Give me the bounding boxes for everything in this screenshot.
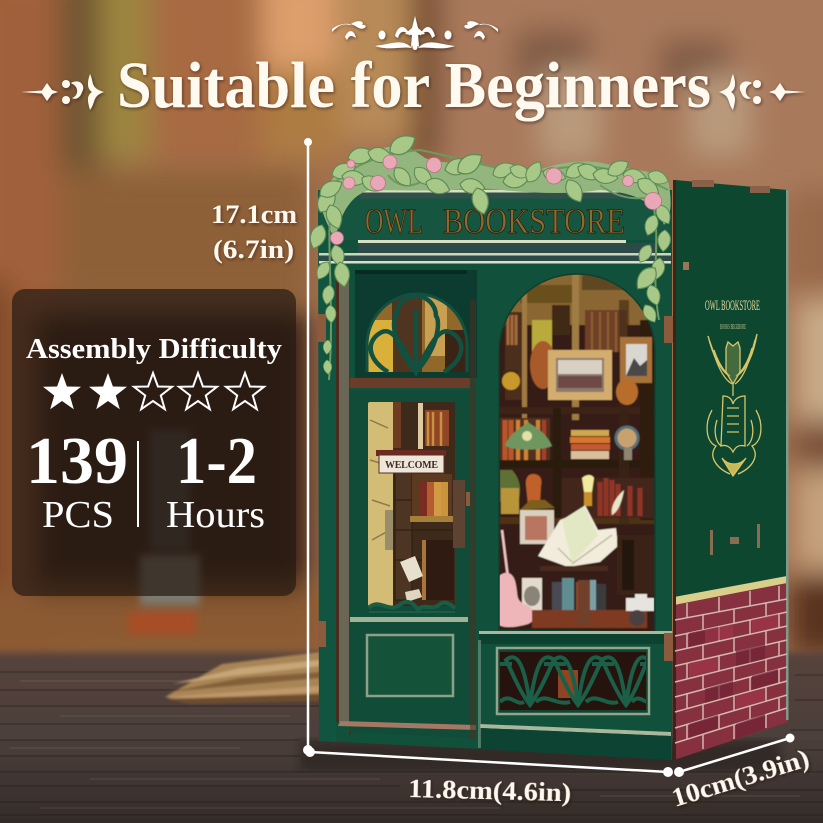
- door scroll trim: [369, 602, 455, 612]
- welcome sign: WELCOME: [385, 460, 438, 471]
- height label: [211, 200, 297, 264]
- star rating: [43, 373, 264, 409]
- small frame: [620, 337, 652, 383]
- depth label: 10cm(3.9in): [668, 743, 813, 813]
- left title ornament: [21, 74, 104, 110]
- height label: 17.1cm: [211, 200, 297, 229]
- side wall: [673, 180, 788, 760]
- top ornament: [332, 16, 498, 50]
- time unit: Hours: [166, 494, 265, 536]
- middle shelf books: [500, 418, 550, 460]
- vines and roses: [306, 130, 674, 380]
- lattice vent: [497, 648, 649, 714]
- shelves: [521, 406, 580, 414]
- width dimension line: [306, 748, 672, 776]
- cornice stripes: [319, 240, 671, 264]
- panel heading: Assembly Difficulty: [26, 334, 282, 365]
- brick wall: [675, 586, 787, 749]
- height label: (6.7in): [213, 235, 294, 264]
- divider: [137, 441, 139, 527]
- welcome sign: [376, 450, 446, 473]
- envelopes on table: [165, 652, 320, 704]
- table lamp: [582, 475, 594, 492]
- left items: [500, 470, 520, 502]
- tiffany lamp: [505, 422, 552, 450]
- piece count: 139: [26, 424, 128, 498]
- owl figurine: [526, 474, 542, 505]
- shop sign text: OWL: [365, 201, 423, 241]
- quill: [612, 490, 624, 515]
- door handle: [453, 480, 465, 548]
- side wall slots: [710, 524, 760, 555]
- base trim: [478, 640, 671, 760]
- main window: [495, 270, 660, 635]
- open book: [538, 505, 618, 567]
- width label: 11.8cm(4.6in): [408, 774, 572, 807]
- difficulty panel: [12, 289, 296, 596]
- owl emblem: [707, 334, 761, 476]
- door: [349, 390, 470, 738]
- window sill: [479, 631, 672, 644]
- big frame: [548, 350, 612, 400]
- violin: [499, 530, 534, 627]
- door lintel: [350, 378, 470, 388]
- right desk: [616, 538, 619, 548]
- ornate oval frame: [530, 341, 556, 389]
- upper shelf books: [505, 312, 522, 400]
- lower books: [522, 578, 542, 610]
- foliage backing: [320, 146, 671, 240]
- depth dimension line: [674, 734, 794, 776]
- red desk front: [532, 610, 647, 628]
- right title ornament: [719, 74, 806, 110]
- bookstore model: [306, 130, 788, 760]
- time value: 1-2: [176, 424, 257, 498]
- lower shelf items: [562, 478, 654, 518]
- door upper recess: [355, 270, 477, 378]
- title: Suitable for Beginners: [117, 49, 711, 122]
- shop sign text: [365, 201, 625, 241]
- mid post: [470, 300, 476, 740]
- clock: [616, 427, 638, 449]
- toy camera: [626, 598, 654, 611]
- door threshold: [338, 721, 476, 730]
- shop sign text: BOOKSTORE: [443, 201, 625, 241]
- shop sign band: [320, 190, 670, 241]
- fan window: [366, 292, 468, 376]
- wooden tabs: [318, 314, 673, 661]
- door glass: [368, 402, 455, 606]
- door panel: [350, 617, 468, 696]
- front face: [319, 190, 672, 760]
- height dimension line: [304, 138, 312, 754]
- wooden table: [0, 652, 823, 823]
- piece unit: PCS: [42, 494, 114, 536]
- entry recess frame: [336, 275, 349, 722]
- side wall: BOOKS BEGEBORE: [720, 323, 746, 331]
